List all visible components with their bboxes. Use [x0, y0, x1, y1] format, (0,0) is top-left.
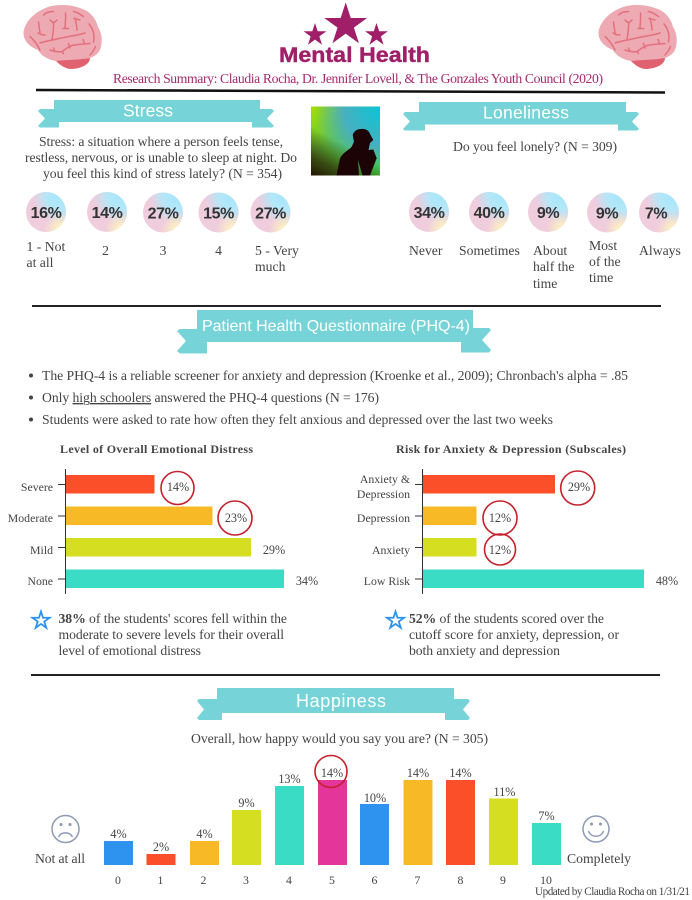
chart: happiness: 13% [278, 772, 301, 786]
icon: right brain [598, 5, 677, 69]
PHQ-4 bullet list: Students were asked to rate how often they felt anxious and depressed over the last two weeks [42, 412, 553, 427]
chart: risk for anxiety and depression: 12% [489, 511, 511, 525]
icon: right star [365, 23, 388, 45]
banner: happiness [197, 688, 470, 720]
label: completely: Completely [567, 851, 631, 866]
stress response 4 [198, 192, 238, 258]
callout: left takeaway [32, 611, 287, 658]
chart: happiness: 9 [500, 873, 506, 887]
chart: risk for anxiety and depression: Depression [357, 511, 410, 525]
loneliness question: Do you feel lonely? (N = 309) [453, 139, 617, 155]
stress response 1: 16% [31, 205, 62, 222]
label: not at all: Not at all [35, 851, 85, 866]
chart: happiness: 5 [329, 873, 335, 887]
subtitle: Research Summary: Claudia Rocha, Dr. Jennifer Lovell, & The Gonzales Youth Council (2020) [113, 71, 603, 87]
chart: happiness: 14% [407, 766, 429, 780]
loneliness response: never [409, 192, 449, 258]
callout: left takeaway: 38% of the students' scores fell within the [58, 611, 287, 626]
chart: happiness: 7% [538, 809, 555, 823]
stress response 3: 27% [148, 206, 179, 222]
chart: risk for anxiety and depression [357, 442, 678, 594]
stress response 1: at all [26, 255, 54, 270]
callout: right takeaway [387, 611, 619, 658]
title with stars [279, 2, 430, 67]
chart: happiness: 14% [321, 766, 343, 780]
loneliness response: sometimes: Sometimes [459, 243, 520, 258]
icon: left star [304, 23, 326, 45]
stress question: restless, nervous, or is unable to sleep at night. Do [25, 150, 297, 165]
panel: loneliness [403, 102, 681, 291]
loneliness response: sometimes [459, 192, 520, 258]
chart: happiness: 4 [286, 873, 292, 887]
loneliness response: always: 7% [645, 206, 667, 222]
stress question: Stress: a situation where a person feels tense, [39, 134, 283, 149]
loneliness response: most of the time: time [589, 270, 613, 285]
stress response 3 [143, 192, 183, 258]
chart: level of overall emotional distress: Mild [30, 543, 53, 557]
chart: happiness: 10% [364, 791, 386, 805]
callout: right takeaway: both anxiety and depression [409, 643, 560, 658]
chart: risk for anxiety and depression: Anxiety [372, 543, 410, 557]
loneliness response: always [639, 192, 681, 258]
callout: left takeaway: level of emotional distress [58, 643, 201, 658]
banner: loneliness: Loneliness [483, 102, 569, 122]
icon: blue star [32, 612, 50, 628]
icon: centre star [324, 2, 367, 43]
callout: left takeaway: moderate to severe levels for their overall [58, 627, 284, 642]
chart: level of overall emotional distress: 34% [296, 574, 318, 588]
loneliness response: most of the time: of the [589, 254, 621, 269]
PHQ-4 bullet list: Only high schoolers answered the PHQ-4 questions (N = 176) [42, 390, 379, 406]
chart: happiness: 4% [196, 827, 213, 841]
loneliness response: always: Always [639, 243, 681, 258]
loneliness response: sometimes: 40% [474, 205, 505, 222]
stress response 2 [87, 192, 127, 258]
chart: level of overall emotional distress [8, 442, 318, 594]
PHQ-4 bullet list [29, 368, 628, 427]
chart title: Level of Overall Emotional Distress [60, 442, 253, 456]
icon: blue star [387, 612, 404, 628]
stress question [25, 134, 297, 182]
banner: loneliness [403, 102, 639, 130]
chart: happiness: 1 [158, 873, 164, 887]
banner: PHQ-4: Patient Health Questionnaire (PHQ-4) [202, 318, 470, 335]
callout: right takeaway: cutoff score for anxiety, depression, or [409, 627, 619, 642]
chart: risk for anxiety and depression: 29% [568, 480, 590, 494]
chart: level of overall emotional distress: None [27, 574, 53, 588]
chart: happiness: 2 [201, 873, 207, 887]
banner: PHQ-4 [177, 310, 491, 354]
chart: risk for anxiety and depression: 12% [489, 543, 511, 557]
photo: silhouette [311, 106, 380, 176]
stress question: you feel this kind of stress lately? (N = 354) [43, 166, 282, 182]
loneliness response: about half the time: time [533, 276, 557, 291]
chart: level of overall emotional distress: Severe [21, 480, 53, 494]
banner: stress: Stress [123, 100, 173, 120]
PHQ-4 bullet list: The PHQ-4 is a reliable screener for anxiety and depression (Kroenke et al., 2009); Chronbach's alpha = .85 [42, 368, 628, 384]
chart: happiness: 8 [458, 873, 464, 887]
chart: risk for anxiety and depression: Low Risk [364, 574, 410, 588]
chart: happiness: 11% [494, 785, 515, 799]
banner: happiness: Happiness [296, 691, 386, 711]
chart: happiness [104, 756, 561, 887]
footer note: Updated by Claudia Rocha on 1/31/21 [535, 886, 690, 898]
stress response 5: much [255, 259, 286, 274]
stress response 1 [26, 192, 66, 270]
chart: happiness: 6 [372, 873, 378, 887]
icon: left brain [23, 5, 102, 69]
stress response 2: 2 [102, 243, 109, 258]
chart: level of overall emotional distress: 14% [167, 480, 189, 494]
icon: sad face [52, 816, 79, 842]
chart: level of overall emotional distress: 23% [225, 511, 247, 525]
loneliness response: about half the time: half the [533, 259, 574, 274]
chart: happiness: 4% [110, 827, 127, 841]
happiness question: Overall, how happy would you say you are? (N = 305) [191, 731, 488, 747]
chart: happiness: 3 [243, 873, 249, 887]
loneliness response: about half the time [528, 192, 574, 291]
chart title: Risk for Anxiety & Depression (Subscales) [396, 442, 626, 456]
loneliness response: most of the time [587, 192, 627, 285]
loneliness response: most of the time: 9% [596, 206, 618, 222]
stress response 5: 5 - Very [255, 243, 299, 258]
chart: happiness: 0 [115, 873, 121, 887]
chart: happiness: 2% [153, 840, 169, 854]
callout: right takeaway: 52% of the students scored over the [409, 611, 604, 626]
chart: risk for anxiety and depression: Depression [357, 487, 410, 501]
stress response 4: 4 [215, 243, 222, 258]
stress response 1: 1 - Not [26, 239, 65, 254]
chart: risk for anxiety and depression: 48% [656, 574, 678, 588]
chart: happiness: 10 [540, 873, 552, 887]
chart: happiness: 14% [449, 766, 472, 780]
chart: risk for anxiety and depression: Anxiety & [360, 472, 410, 486]
loneliness response: about half the time: About [533, 243, 567, 258]
chart: happiness: 9% [238, 796, 255, 810]
stress response 3: 3 [160, 243, 167, 258]
title text: Mental Health [279, 44, 430, 67]
stress response 2: 14% [92, 205, 123, 222]
chart: happiness: 7 [415, 873, 421, 887]
chart: level of overall emotional distress: 29% [263, 543, 285, 557]
loneliness response: never: Never [409, 243, 443, 258]
stress response 4: 15% [203, 206, 234, 222]
icon: happy face [583, 816, 609, 842]
loneliness response: about half the time: 9% [537, 205, 559, 222]
stress response 5: 27% [255, 206, 286, 222]
banner: stress [38, 100, 274, 128]
loneliness response: most of the time: Most [589, 238, 617, 253]
loneliness response: never: 34% [414, 205, 445, 222]
stress response 5 [250, 192, 299, 274]
panel: stress [25, 100, 299, 274]
chart: level of overall emotional distress: Moderate [8, 511, 53, 525]
